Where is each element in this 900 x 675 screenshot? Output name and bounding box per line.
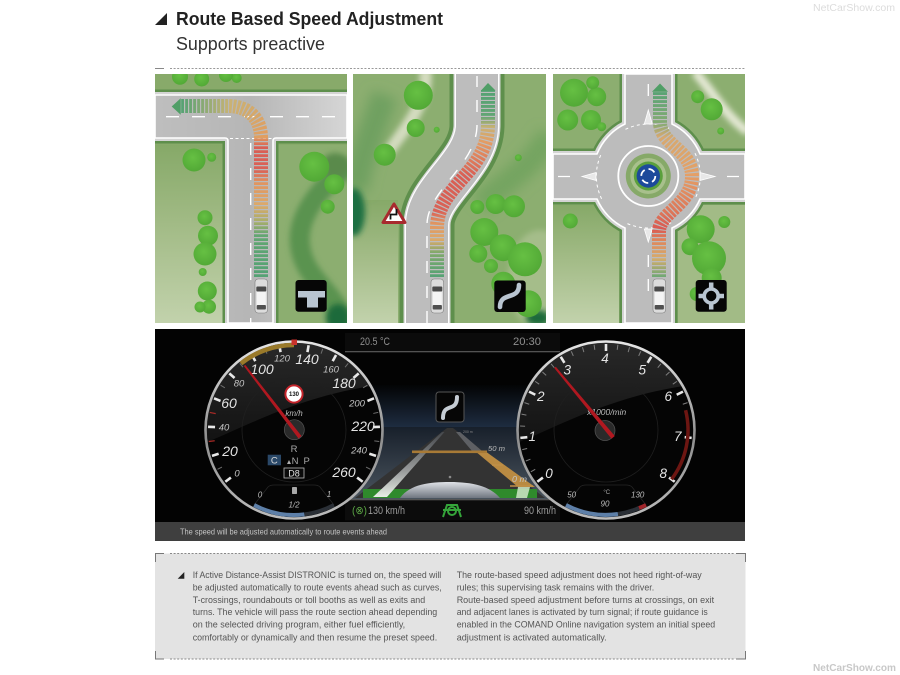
car: T-crossing	[255, 279, 268, 313]
rpm labels: 2	[536, 389, 545, 404]
title block	[155, 8, 443, 54]
text column left: on the selected driving program, either fuel efficiently,	[193, 620, 405, 630]
rpm labels: 1	[529, 429, 536, 444]
text column left: comfortably or dynamically and then resume the preset speed.	[193, 632, 437, 642]
fuel gauge	[254, 487, 334, 515]
gear selector: C	[271, 456, 278, 466]
panel: curve map	[353, 74, 546, 323]
speed labels: 0	[234, 468, 240, 480]
status band: 130 km/h	[368, 505, 405, 517]
red zone	[672, 410, 688, 479]
driving assistance scene	[345, 385, 560, 499]
icon: roundabout sign	[696, 280, 727, 312]
tachometer	[512, 335, 697, 518]
speed limit sign: 130	[289, 392, 300, 398]
rpm labels: 4	[601, 351, 609, 366]
gear selector: D8	[288, 468, 300, 478]
icon: active assist steering wheel	[443, 505, 461, 517]
icon: winding road warning sign	[383, 204, 405, 222]
coolant gauge	[566, 490, 646, 515]
speed bars: roundabout	[659, 91, 692, 277]
clock: 20:30	[513, 336, 541, 348]
text column left: If Active Distance-Assist DISTRONIC is turned on, the speed will	[193, 570, 441, 580]
panel: roundabout map	[553, 72, 748, 323]
speed labels: 40	[219, 422, 230, 434]
text column left: turns. The vehicle will pass the route section ahead depending	[193, 607, 437, 617]
speed labels	[219, 351, 375, 480]
gear selector	[268, 444, 310, 478]
trees: roundabout	[557, 76, 730, 301]
tick marks	[520, 344, 692, 482]
icon: curve sign	[494, 280, 526, 312]
watermark top: NetCarShow.com	[813, 3, 895, 14]
text column right: Route-based speed adjustment before turns at crossings, on exit	[457, 595, 715, 605]
driving assistance scene: 200 m	[463, 430, 473, 434]
fuel gauge: 0	[258, 490, 263, 500]
speed labels: 120	[274, 354, 291, 364]
subtitle: Supports preactive	[176, 34, 325, 54]
text column left	[193, 570, 442, 642]
yield triangles	[582, 110, 715, 242]
coolant gauge: 90	[601, 500, 610, 508]
outside temperature: 20.5 °C	[360, 336, 390, 348]
needle	[244, 365, 302, 438]
speed labels: 60	[221, 395, 237, 411]
car: roundabout	[653, 279, 666, 313]
speed labels: 20	[221, 443, 238, 459]
needle	[554, 367, 615, 439]
speed bars: T-crossing	[181, 106, 261, 277]
text column right: rules; this supervising task remains with the driver.	[457, 582, 654, 592]
gear selector: P	[304, 456, 310, 467]
speed labels: 260	[331, 464, 356, 480]
rpm unit: x1000/min	[586, 408, 627, 417]
set speed arc	[241, 345, 294, 364]
text column right	[457, 570, 715, 642]
coolant gauge: 50	[567, 490, 577, 500]
arrow: T-crossing route	[172, 98, 181, 115]
trees: T-crossing	[172, 68, 344, 314]
roundabout island	[618, 146, 678, 206]
speed bars: curve	[437, 90, 488, 277]
coolant gauge: 130	[631, 490, 645, 500]
text column left: T-crossings, roundabouts or toll booths as well as exits and	[193, 595, 425, 605]
speed limit sign	[285, 385, 303, 403]
rpm labels: 0	[545, 466, 553, 481]
title: Route Based Speed Adjustment	[176, 8, 443, 29]
rpm labels: 8	[660, 466, 668, 481]
fuel gauge: 1	[327, 490, 331, 499]
speed labels: 100	[250, 361, 274, 377]
panel: instrument cluster	[155, 329, 745, 541]
speedometer	[200, 335, 385, 518]
message bar: The speed will be adjusted automatically to route events ahead	[180, 526, 387, 536]
text column right: adjustment is activated automatically.	[457, 632, 607, 642]
speed labels: 200	[348, 398, 366, 410]
text column right: enabled in the COMAND Online navigation system an initial speed	[457, 620, 715, 630]
speed labels: 240	[350, 446, 368, 456]
speed labels: 220	[350, 418, 375, 434]
speed unit: km/h	[285, 409, 303, 418]
text column left: be adjusted automatically to route events ahead such as curves,	[193, 582, 442, 592]
icon: T-crossing sign	[296, 280, 327, 312]
header band	[345, 333, 560, 352]
icon: bullet triangle	[178, 572, 184, 579]
message bar	[155, 522, 745, 541]
driving assistance scene: 0 m	[512, 475, 527, 484]
fuel gauge: 1/2	[288, 500, 300, 510]
icon: title triangle	[155, 13, 167, 25]
panel: T-crossing map	[155, 68, 350, 332]
text column right: and adjacent lanes is activated by turn signal; if route guidance is	[457, 607, 708, 617]
trees: curve	[374, 81, 542, 317]
car: curve	[431, 279, 444, 313]
watermark bottom: NetCarShow.com	[813, 663, 896, 674]
current speed: 90 km/h	[524, 505, 556, 517]
rpm labels: 6	[665, 389, 673, 404]
rpm labels: 3	[564, 362, 572, 378]
needle hub	[284, 420, 304, 440]
distance labels: 50 m	[488, 446, 505, 453]
tick marks	[208, 345, 380, 482]
speed labels: 140	[295, 351, 319, 367]
speed labels: 80	[234, 378, 245, 390]
coolant gauge: °C	[603, 490, 611, 496]
rpm labels: 5	[639, 362, 647, 378]
gear selector: N	[292, 456, 299, 467]
icon: curve event	[436, 392, 464, 422]
speed labels: 160	[323, 364, 340, 376]
arrow: curve route	[481, 83, 496, 90]
text column right: The route-based speed adjustment does not heed right-of-way	[457, 570, 702, 580]
set speed: (⊗)	[352, 505, 367, 517]
rpm labels	[529, 351, 682, 481]
needle hub	[595, 420, 615, 440]
panel: explanation text box	[155, 554, 746, 659]
arrow: roundabout route	[652, 84, 668, 92]
gear selector: R	[291, 444, 298, 455]
rpm labels: 7	[674, 429, 682, 444]
speed labels: 180	[332, 375, 356, 391]
status band	[345, 499, 560, 520]
